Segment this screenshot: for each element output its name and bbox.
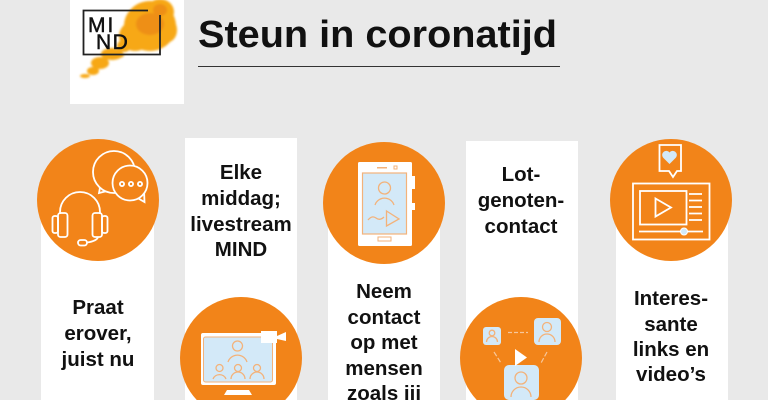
label: lotgenotencontact: Lot- (502, 163, 540, 186)
panel: lotgenotencontact (460, 141, 582, 400)
label: neem contact op: op met (350, 331, 418, 354)
label: livestream: Elke (220, 161, 262, 184)
label: interessante links: video’s (636, 363, 706, 386)
panel: interessante links (610, 139, 732, 400)
panel: praat erover (37, 139, 159, 400)
label: livestream: middag; (201, 187, 281, 210)
label: lotgenotencontact: genoten- (478, 189, 564, 212)
label: neem contact op: contact (348, 306, 421, 329)
logo panel (70, 0, 184, 104)
label: interessante links: sante (644, 313, 698, 336)
label: praat erover: juist nu (61, 348, 134, 371)
label: interessante links: links en (633, 338, 709, 361)
icon: video call screen (180, 297, 302, 400)
icon: smartphone (323, 142, 445, 264)
label: livestream: livestream (190, 213, 292, 236)
label: neem contact op: mensen (345, 357, 423, 380)
logo: frame and wordmark: MI (88, 14, 115, 37)
icon: video player with heart (610, 139, 732, 261)
logo: frame and wordmark: ND (96, 31, 129, 54)
label: neem contact op: Neem (356, 280, 412, 303)
label: interessante links: Interes- (634, 287, 708, 310)
icon: headset and speech bubbles (37, 139, 159, 261)
panel: livestream (180, 138, 302, 400)
panel: neem contact op (323, 142, 445, 400)
label: praat erover: Praat (72, 296, 124, 319)
icon: connected people (460, 297, 582, 400)
label: lotgenotencontact: contact (485, 215, 558, 238)
label: praat erover: erover, (64, 322, 132, 345)
logo: orange smoke (80, 0, 177, 78)
title: Steun in coronatijd (198, 14, 557, 56)
logo: frame and wordmark (84, 10, 160, 54)
label: livestream: MIND (215, 238, 267, 261)
